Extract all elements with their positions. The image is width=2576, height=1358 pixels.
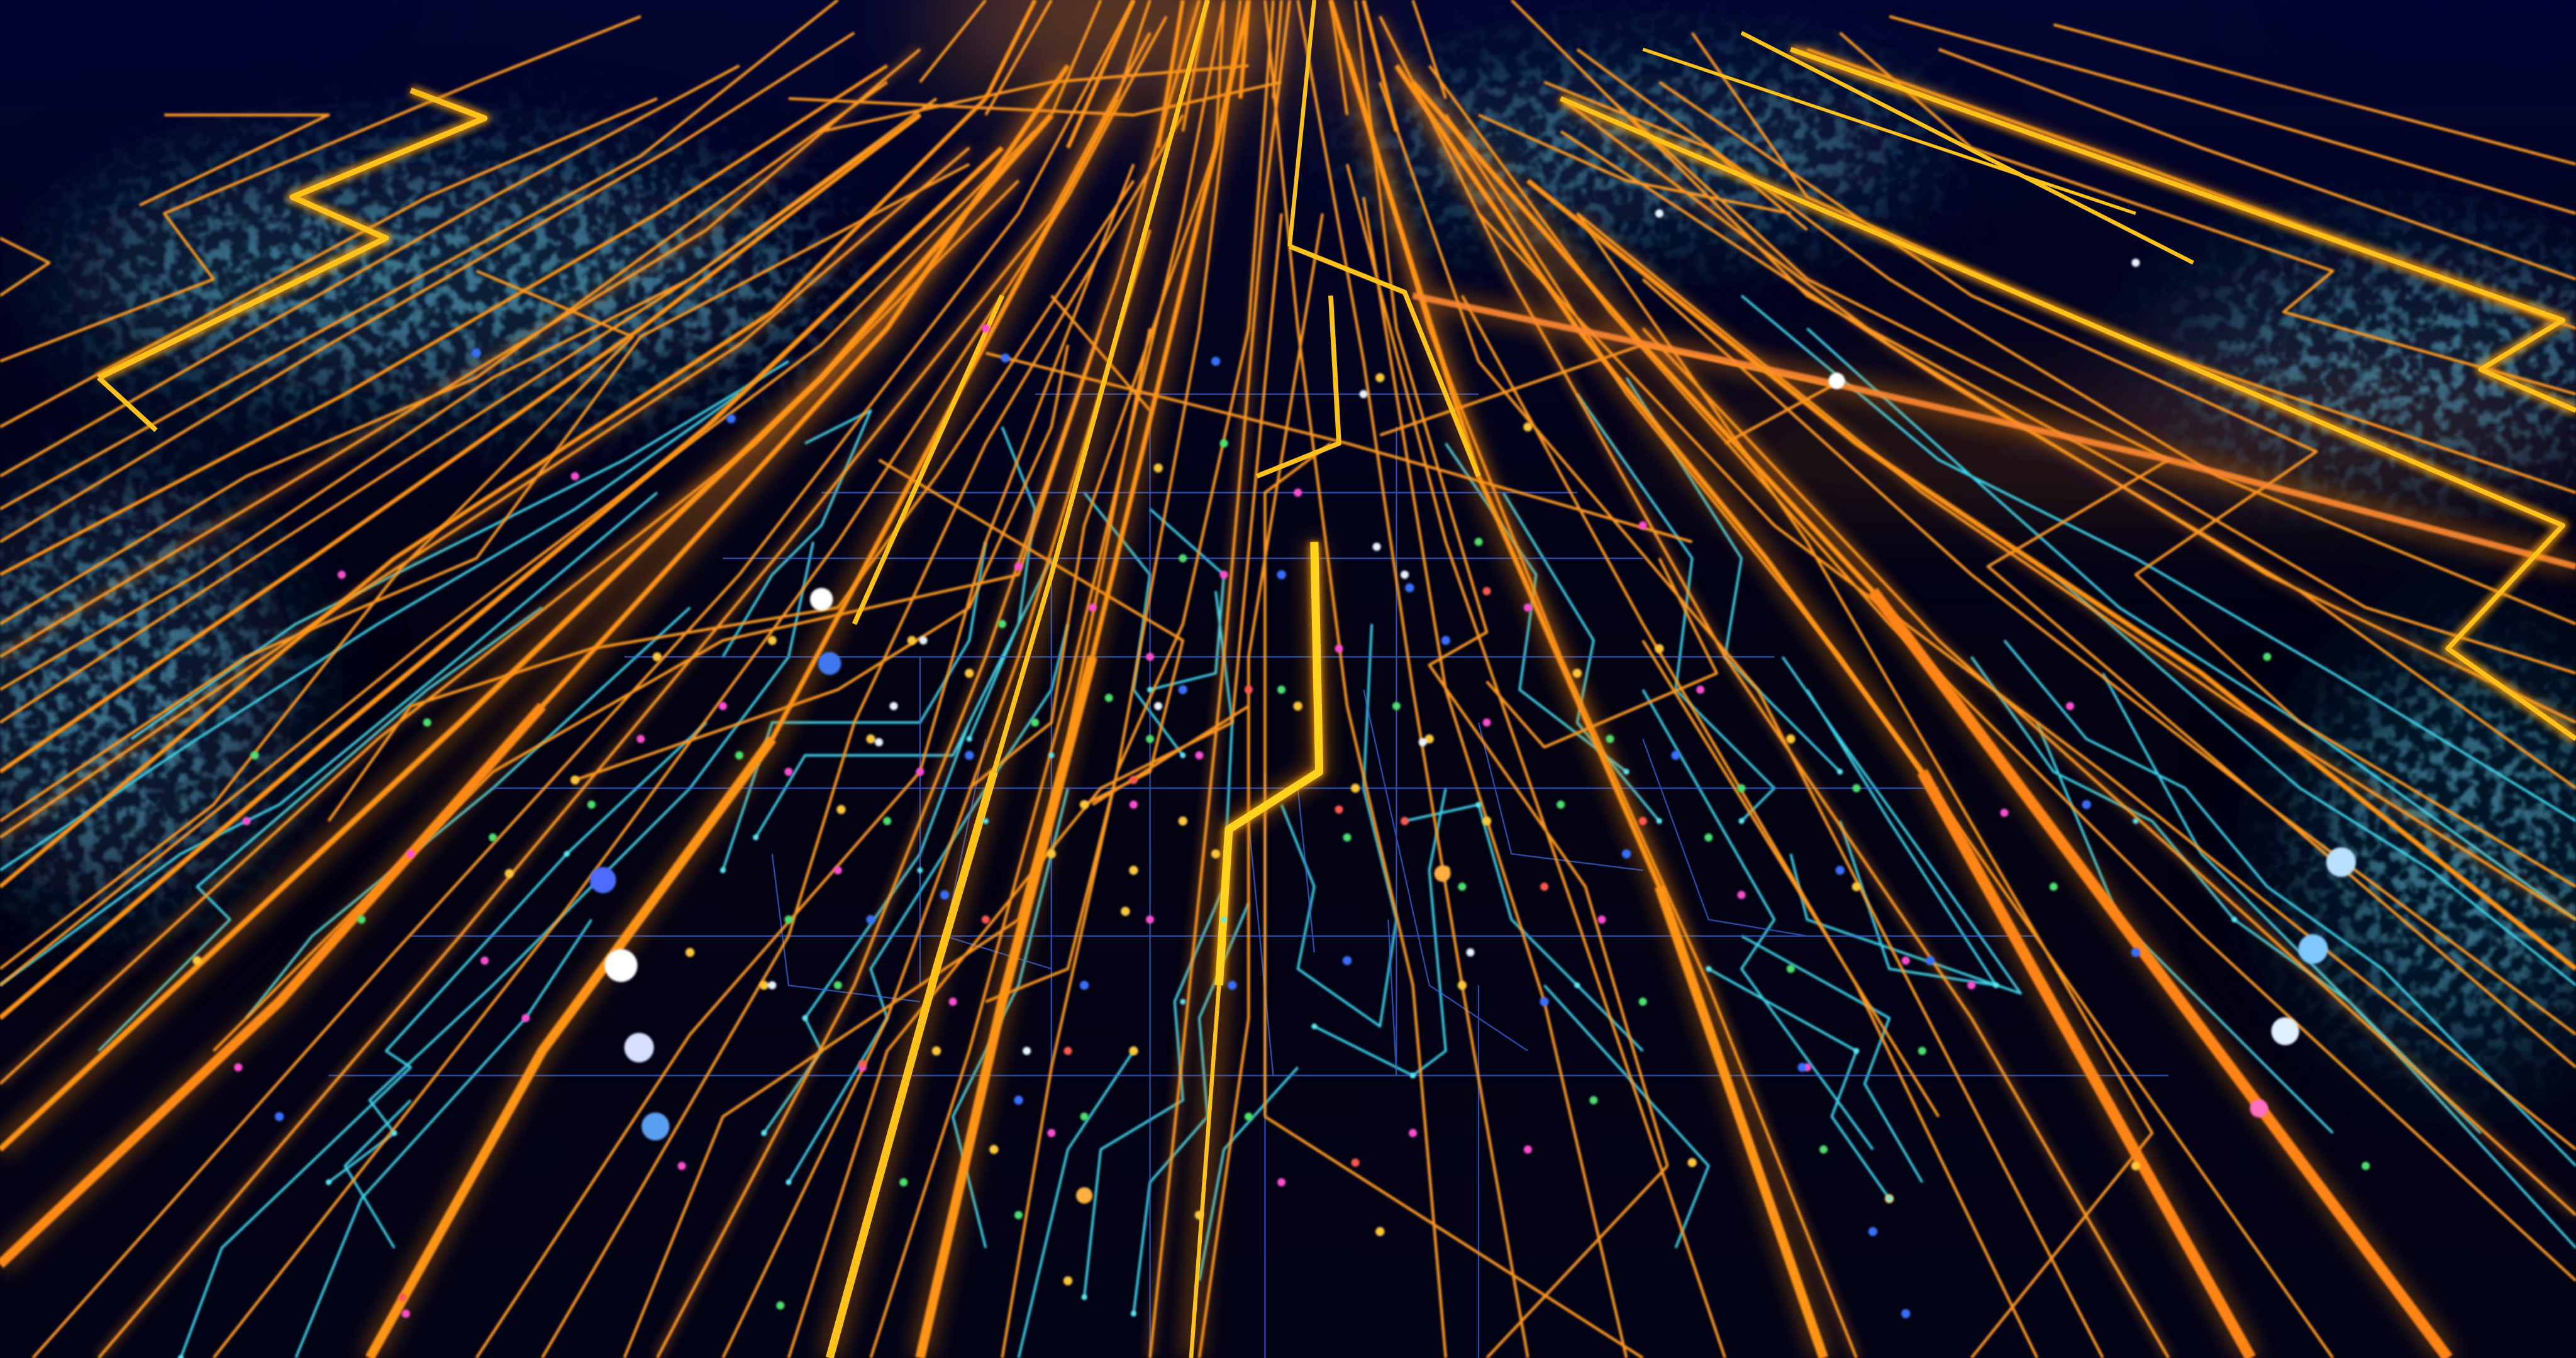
speckled board texture (0, 18, 2576, 1088)
fine blue grid (328, 394, 2168, 1358)
coloured bokeh dots (180, 214, 2366, 1358)
cyan circuit traces (0, 295, 2576, 1358)
corner vignette (0, 0, 2576, 65)
teal haze (0, 0, 2576, 1084)
